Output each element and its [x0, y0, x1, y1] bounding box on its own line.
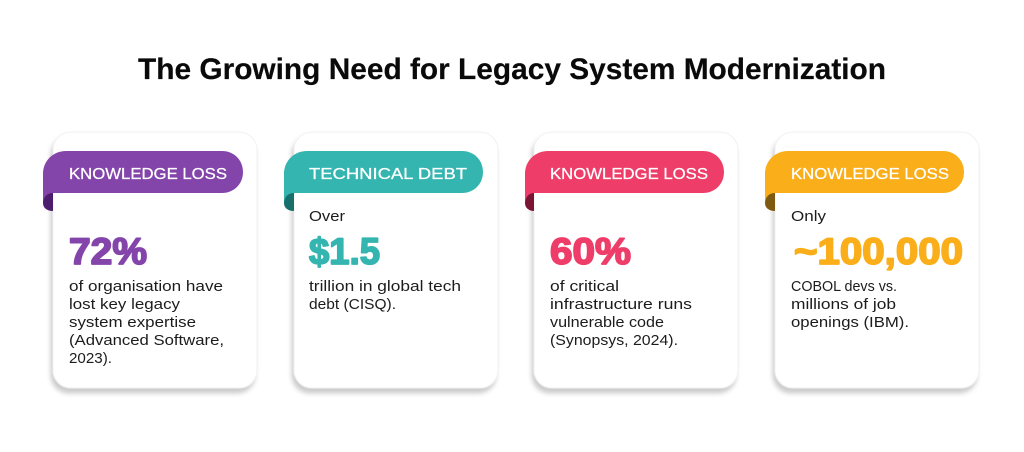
description: debt (CISQ). [309, 297, 396, 313]
description: of critical [550, 279, 619, 295]
description: 2023). [69, 351, 112, 367]
ribbon [765, 151, 964, 204]
card background [53, 132, 257, 388]
title: The Growing Need for Legacy System Modernization [138, 53, 886, 86]
panel: technical debt $1.5 [284, 132, 498, 388]
ribbon fold [284, 193, 294, 211]
ribbon: KNOWLEDGE LOSS [550, 166, 708, 183]
description [791, 279, 909, 331]
statistic: 60% [550, 231, 631, 272]
description: of organisation have [69, 279, 223, 295]
ribbon [284, 151, 483, 204]
card background [294, 132, 498, 388]
ribbon fold [765, 193, 775, 211]
description: system expertise [69, 315, 196, 331]
description: (Advanced Software, [69, 333, 224, 349]
description: COBOL devs vs. [791, 279, 897, 295]
description: infrastructure runs [550, 297, 692, 313]
card background [534, 132, 738, 388]
ribbon: TECHNICAL DEBT [309, 166, 468, 183]
statistic: 72% [69, 231, 147, 272]
ribbon: KNOWLEDGE LOSS [791, 166, 949, 183]
description: openings (IBM). [791, 315, 909, 331]
description: lost key legacy [69, 297, 181, 313]
ribbon [43, 151, 243, 204]
statistic: $1.5 [309, 231, 380, 272]
description [309, 279, 461, 313]
ribbon fold [525, 193, 534, 211]
description: (Synopsys, 2024). [550, 333, 678, 349]
lead-in: Only [791, 209, 827, 225]
ribbon: KNOWLEDGE LOSS [69, 166, 227, 183]
description: trillion in global tech [309, 279, 461, 295]
ribbon [525, 151, 724, 204]
lead-in: Over [309, 209, 345, 225]
description: vulnerable code [550, 315, 664, 331]
panel: knowledge loss 60% [525, 132, 738, 388]
panel: knowledge loss ~100,000 [765, 132, 979, 388]
card background [775, 132, 979, 388]
statistic: ~100,000 [794, 231, 963, 272]
description [550, 279, 692, 349]
description: millions of job [791, 297, 896, 313]
description [69, 279, 224, 367]
ribbon fold [43, 193, 53, 211]
panel: knowledge loss 72% [43, 132, 257, 388]
